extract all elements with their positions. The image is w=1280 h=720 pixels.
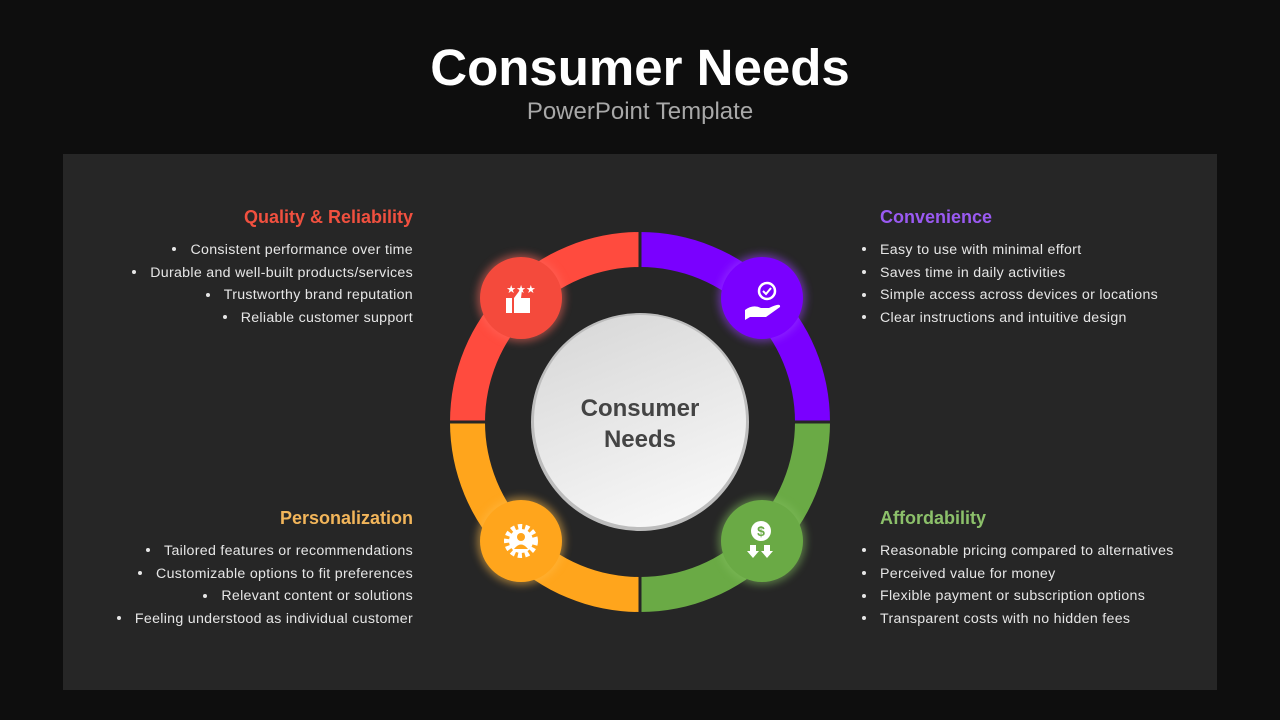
text block: quality & reliability: Consistent performance over time [190,242,413,258]
icon: gear user [477,497,565,585]
text block: affordability: Flexible payment or subscription options [880,588,1145,604]
text block: quality & reliability: Quality & Reliability [244,207,413,227]
center circle: Consumer [581,395,699,422]
icon: hand with clock check [718,254,806,342]
ring segments [445,225,835,620]
text block: quality & reliability [132,207,413,326]
text block: convenience: Convenience [880,207,992,227]
text block: convenience: Simple access across devices or locations [880,287,1158,303]
text block: convenience: Saves time in daily activities [880,265,1066,281]
icon: thumbs up stars: ★★★ [506,284,536,296]
text block: personalization [117,508,413,627]
text block: personalization: Customizable options to fit preferences [156,566,413,582]
text block: affordability: Reasonable pricing compared to alternatives [880,543,1174,559]
text block: affordability: Affordability [880,508,986,528]
text block: quality & reliability: Reliable customer support [241,310,413,326]
icon: dollar down: $ [757,523,765,539]
subtitle: PowerPoint Template [527,98,753,125]
center circle [531,313,749,531]
icon: dollar down [718,497,806,585]
text block: affordability: Transparent costs with no hidden fees [880,611,1130,627]
text block: personalization: Relevant content or solutions [221,588,413,604]
center circle: Needs [604,426,676,453]
text block: affordability: Perceived value for money [880,566,1055,582]
text block: quality & reliability: Durable and well-built products/services [150,265,413,281]
icon: thumbs up stars [477,254,565,342]
text block: convenience [862,207,1158,326]
text block: convenience: Clear instructions and intuitive design [880,310,1127,326]
title: Consumer Needs [430,39,850,96]
text block: affordability [862,508,1174,627]
text block: personalization: Tailored features or recommendations [164,543,413,559]
text block: convenience: Easy to use with minimal effort [880,242,1081,258]
text block: quality & reliability: Trustworthy brand reputation [224,287,413,303]
text block: personalization: Feeling understood as individual customer [135,611,413,627]
text block: personalization: Personalization [280,508,413,528]
panel: main content [63,154,1217,690]
